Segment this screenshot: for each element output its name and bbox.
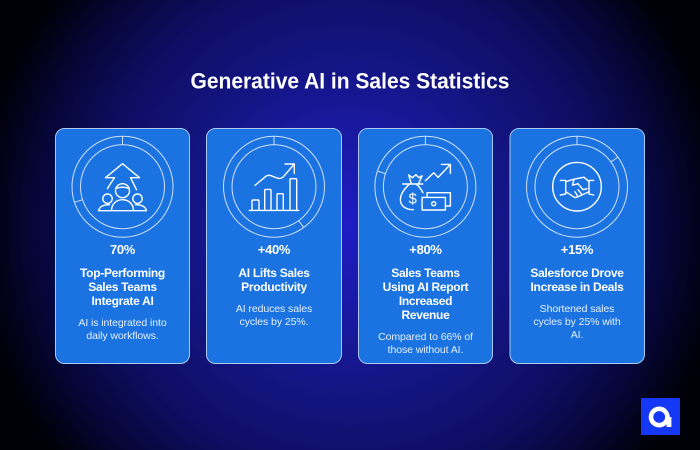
icon: dollar sign: $: [409, 191, 418, 208]
icon: handshake in circle: [553, 162, 601, 211]
progress ring: 70%: [72, 136, 173, 237]
progress ring: 15%: [526, 136, 628, 237]
description: cycles by 25%.: [240, 316, 308, 328]
description: AI is integrated into: [78, 317, 167, 329]
stat: 70%: 70%: [110, 242, 136, 257]
title: Generative AI in Sales Statistics: [190, 68, 510, 94]
description: those without AI.: [388, 344, 463, 356]
heading: Sales Teams: [391, 266, 460, 280]
heading: Using AI Report: [383, 280, 469, 294]
panel: top-performing teams: [56, 128, 190, 364]
heading: Productivity: [241, 280, 307, 294]
heading: Increase in Deals: [531, 280, 624, 294]
description: cycles by 25% with: [533, 316, 621, 328]
stat: +80%: +80%: [409, 242, 442, 257]
progress ring: 80%: [375, 136, 476, 237]
description: daily workflows.: [86, 330, 159, 342]
progress ring: 40%: [224, 136, 324, 237]
panel: deals: [510, 128, 644, 364]
description: AI reduces sales: [236, 303, 312, 315]
heading: Integrate AI: [92, 294, 153, 308]
heading: AI Lifts Sales: [238, 266, 310, 280]
stat: +40%: +40%: [258, 242, 291, 257]
icon: team with upward arrow: [98, 164, 146, 211]
panel: productivity: [206, 128, 342, 364]
stat: +15%: +15%: [561, 242, 594, 257]
icon: bar chart with rising arrow: [249, 164, 299, 210]
description: Compared to 66% of: [378, 331, 473, 343]
heading: Sales Teams: [88, 280, 157, 294]
logo: [641, 398, 680, 435]
heading: Revenue: [402, 308, 450, 322]
heading: Salesforce Drove: [530, 266, 624, 280]
description: AI.: [571, 329, 583, 341]
panel: revenue: [358, 128, 492, 364]
heading: Top-Performing: [80, 266, 165, 280]
icon: money bag, cash and rising arrow: [400, 164, 450, 210]
description: Shortened sales: [540, 303, 614, 315]
heading: Increased: [399, 294, 452, 308]
